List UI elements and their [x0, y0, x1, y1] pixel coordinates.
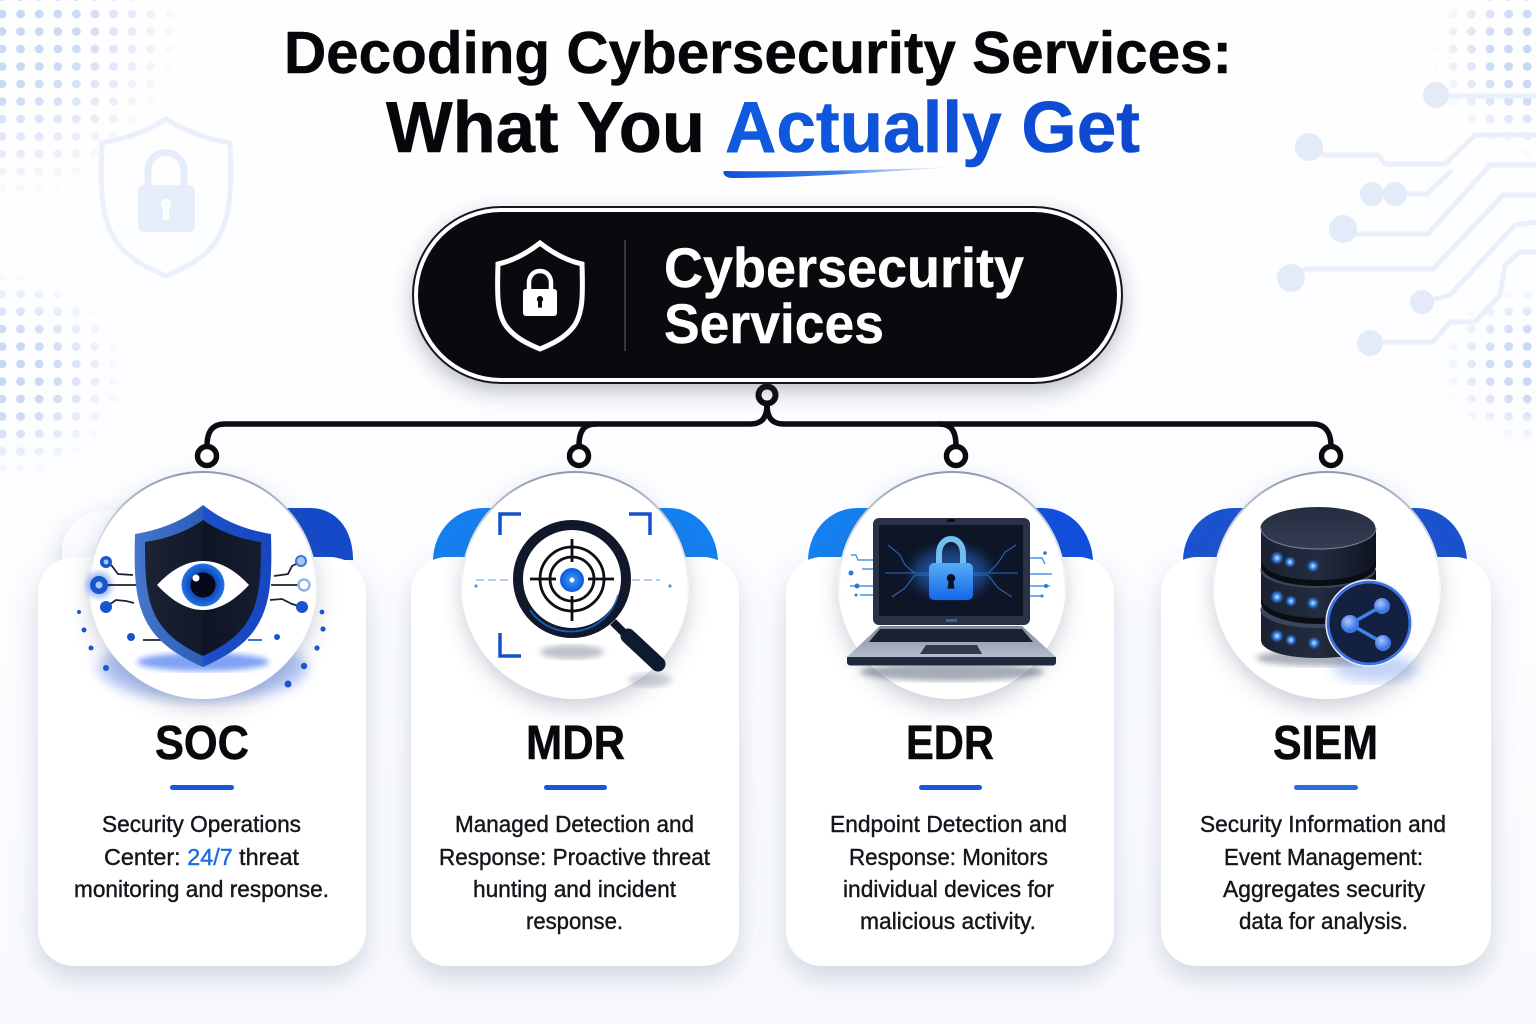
background dot pattern [0, 0, 1536, 480]
connector node: EDR [946, 446, 966, 466]
heading: SOC [155, 717, 249, 770]
description: individual devices for [843, 876, 1054, 902]
description: monitoring and response. [74, 876, 329, 902]
icon: shield with padlock [498, 243, 582, 349]
root pill: Cybersecurity Services [413, 207, 1122, 383]
connector node: top hub [758, 386, 776, 404]
panel: EDR [786, 472, 1114, 966]
icon: database with share badge [1256, 507, 1417, 682]
icon: laptop with padlock [847, 518, 1056, 681]
description: hunting and incident [473, 876, 677, 902]
connector node: SIEM [1322, 446, 1340, 466]
description [1200, 811, 1446, 934]
panel: SOC [38, 472, 366, 966]
watermark: circuit traces [1277, 82, 1536, 356]
connector node: SOC [198, 446, 216, 466]
description: Center: 24/7 threat [104, 844, 300, 870]
connector lines [198, 386, 1340, 466]
watermark: shield with padlock [101, 119, 231, 276]
description: data for analysis. [1239, 908, 1408, 934]
panel: MDR [411, 472, 739, 966]
description: Managed Detection and [455, 811, 694, 837]
description: Security Operations [102, 811, 301, 837]
panel: SIEM [1161, 472, 1491, 966]
description: response. [526, 908, 623, 934]
description: Aggregates security [1223, 876, 1425, 902]
heading: SIEM [1273, 717, 1378, 770]
title: Actually Get [725, 88, 1140, 168]
title underline brush stroke [723, 167, 955, 178]
icon: shield with eye [77, 505, 326, 688]
pill label: Cybersecurity [664, 236, 1024, 299]
description: Security Information and [1200, 811, 1446, 837]
title: Decoding Cybersecurity Services: [284, 20, 1232, 86]
icon: magnifier over target [474, 514, 672, 687]
heading: MDR [526, 717, 625, 770]
description: Response: Proactive threat [439, 844, 711, 870]
heading: EDR [906, 717, 994, 770]
description: Event Management: [1224, 844, 1423, 870]
description [439, 811, 711, 934]
description: Endpoint Detection and [830, 811, 1067, 837]
description [830, 811, 1067, 934]
description: malicious activity. [860, 908, 1036, 934]
pill label [664, 236, 1024, 355]
title: What You [386, 88, 705, 168]
title [284, 20, 1232, 168]
pill label: Services [664, 292, 884, 355]
description: Response: Monitors [849, 844, 1048, 870]
description [74, 811, 329, 902]
connector node: MDR [570, 446, 588, 466]
